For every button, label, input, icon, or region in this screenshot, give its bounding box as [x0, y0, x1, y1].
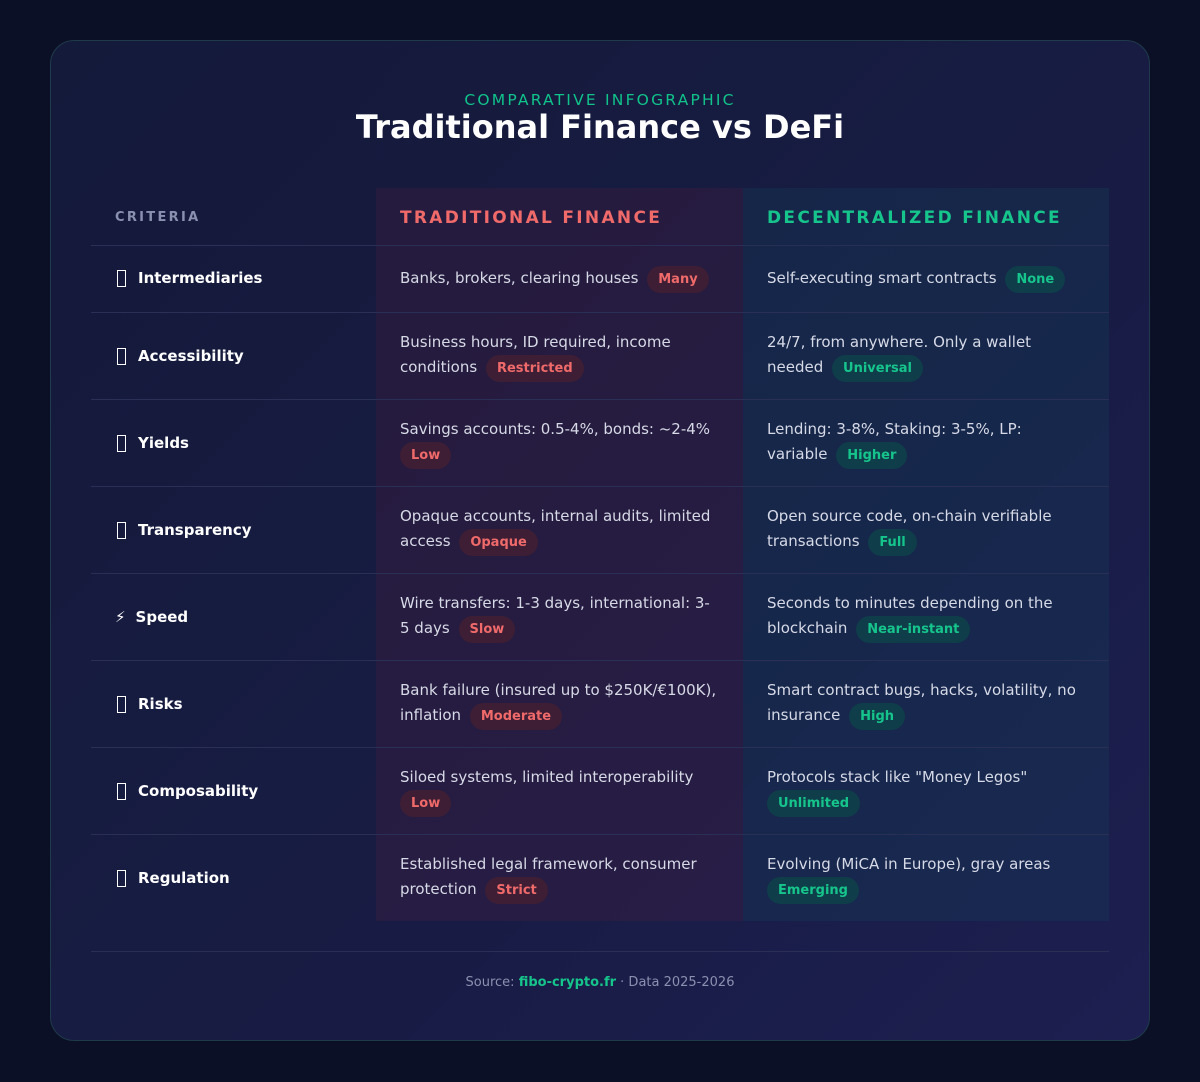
row: intermediaries: Intermediaries	[138, 269, 262, 287]
row: yields	[91, 400, 1109, 487]
row: composability	[91, 748, 1109, 835]
title: Traditional Finance vs DeFi	[356, 108, 844, 146]
row: risks: Smart contract bugs, hacks, volatility, no insurance	[767, 681, 1076, 724]
row: accessibility: Restricted	[497, 361, 573, 376]
row: speed: Speed	[136, 608, 188, 626]
footer divider	[91, 951, 1109, 952]
row: yields: Higher	[847, 448, 896, 463]
row: regulation: Regulation	[138, 869, 230, 887]
table	[91, 188, 1109, 921]
row: accessibility: 24/7, from anywhere. Only a wallet needed	[767, 333, 1031, 376]
row: transparency	[91, 487, 1109, 574]
header row: DECENTRALIZED FINANCE	[767, 208, 1062, 228]
row: yields: Low	[411, 448, 440, 463]
row: transparency: Transparency	[138, 521, 252, 539]
subtitle: COMPARATIVE INFOGRAPHIC	[464, 91, 736, 109]
row: risks: Moderate	[481, 709, 551, 724]
row: composability: Composability	[138, 782, 258, 800]
row: yields: Lending: 3-8%, Staking: 3-5%, LP: variable	[767, 420, 1022, 463]
row: intermediaries: Many	[658, 272, 698, 287]
row: intermediaries: Banks, brokers, clearing houses	[400, 269, 638, 287]
row: risks: Bank failure (insured up to $250K/€100K), inflation	[400, 681, 716, 724]
row: speed: Slow	[470, 622, 504, 637]
row: transparency: Opaque accounts, internal audits, limited access	[400, 507, 710, 550]
header row: TRADITIONAL FINANCE	[400, 208, 662, 228]
row: accessibility: Universal	[843, 361, 912, 376]
row: transparency: Full	[879, 535, 906, 550]
row: transparency: Open source code, on-chain verifiable transactions	[767, 507, 1052, 550]
row: speed: Near-instant	[867, 622, 959, 637]
source: Source: fibo-crypto.fr · Data 2025-2026	[466, 975, 734, 990]
row: speed: Seconds to minutes depending on the blockchain	[767, 594, 1053, 637]
row: yields: Savings accounts: 0.5-4%, bonds: ~2-4%	[400, 420, 710, 438]
row: regulation: Established legal framework, consumer protection	[400, 855, 697, 898]
row: regulation: Evolving (MiCA in Europe), gray areas	[767, 855, 1050, 873]
row: accessibility: Accessibility	[138, 347, 244, 365]
row: intermediaries: None	[1016, 272, 1054, 287]
row: accessibility: Business hours, ID required, income conditions	[400, 333, 671, 376]
header row: CRITERIA	[115, 210, 200, 225]
row: regulation	[117, 855, 1050, 904]
row: accessibility	[91, 313, 1109, 400]
row: composability: Protocols stack like "Money Legos"	[767, 768, 1027, 786]
row: risks	[91, 661, 1109, 748]
row: risks: Risks	[138, 695, 183, 713]
row: speed	[91, 574, 1109, 661]
row: composability: Unlimited	[778, 796, 849, 811]
row: composability: Low	[411, 796, 440, 811]
header row	[91, 188, 1109, 246]
row: speed: ⚡	[115, 608, 126, 626]
row: risks: High	[860, 709, 894, 724]
row: intermediaries: Self-executing smart contracts	[767, 269, 997, 287]
row: intermediaries	[91, 246, 1109, 313]
row: speed: Wire transfers: 1-3 days, international: 3-5 days	[400, 594, 710, 637]
row: regulation: Emerging	[778, 883, 848, 898]
row: regulation: Strict	[496, 883, 537, 898]
row: yields: Yields	[138, 434, 189, 452]
row: transparency: Opaque	[470, 535, 527, 550]
row: composability: Siloed systems, limited interoperability	[400, 768, 693, 786]
